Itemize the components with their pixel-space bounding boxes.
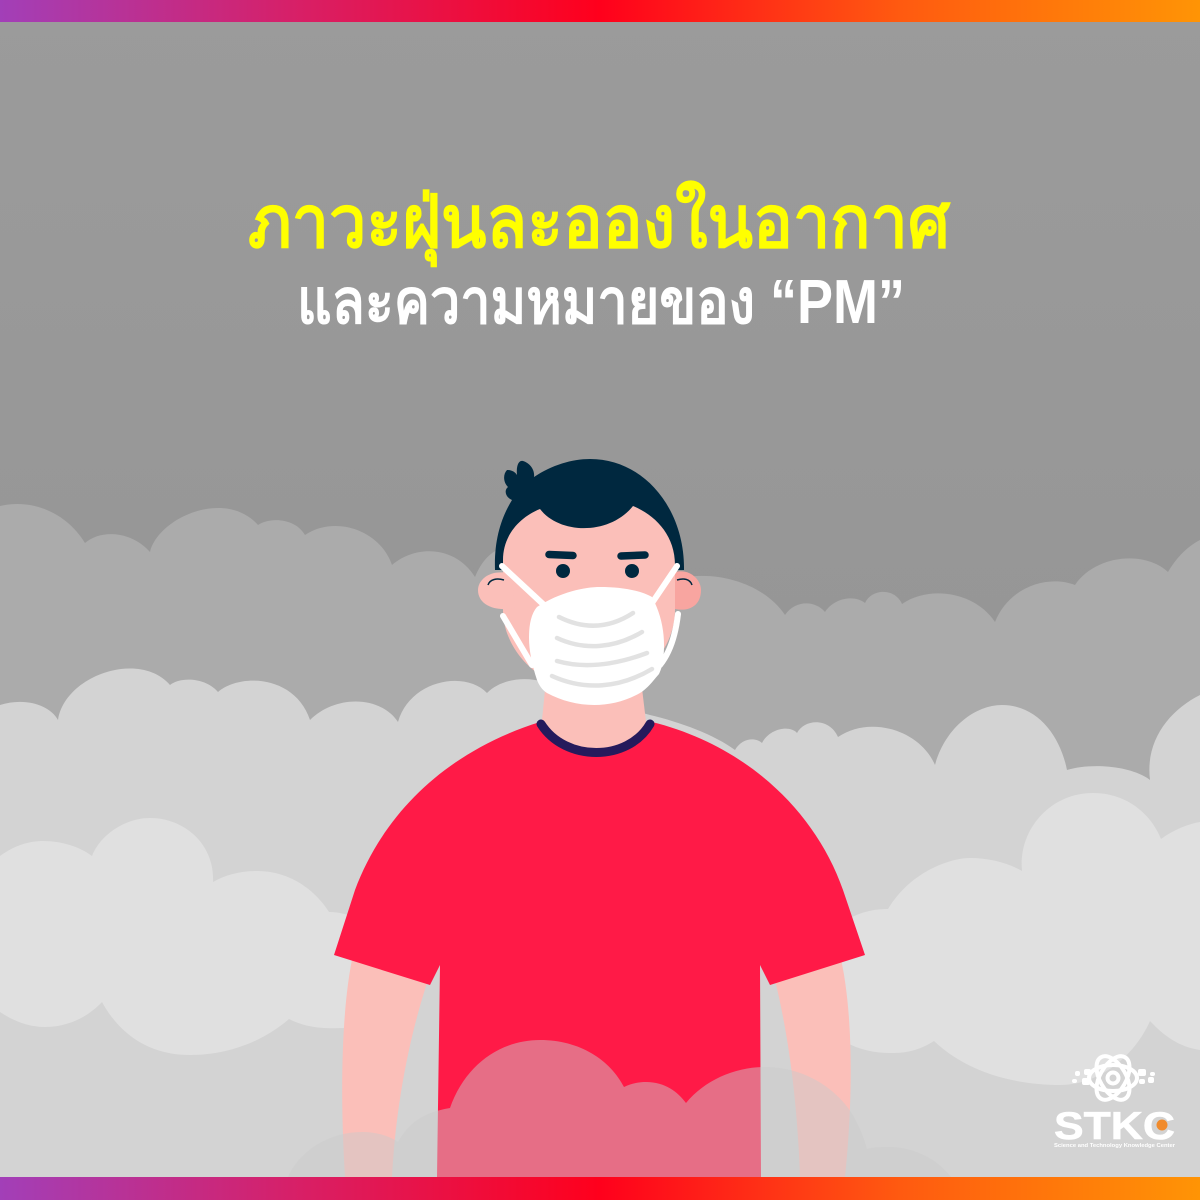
face: [503, 506, 675, 690]
mask straps: [502, 566, 678, 665]
left arm: [342, 955, 428, 1177]
bottom gradient band: [0, 1177, 1200, 1200]
middle cloud layer: [0, 669, 1200, 1200]
top gradient band: [0, 0, 1200, 22]
subtitle: และความหมายของ “PM”: [297, 268, 905, 337]
left eyebrow: [549, 554, 573, 556]
logo accent dot: [1156, 1120, 1168, 1130]
right eyebrow: [621, 555, 645, 556]
logo atom icon: [1089, 1051, 1137, 1105]
left eye: [556, 564, 570, 578]
neck: [541, 680, 647, 750]
logo dots: [1072, 1069, 1155, 1085]
shirt collar: [541, 724, 650, 752]
back cloud layer: [0, 504, 1200, 1200]
hair: [495, 459, 684, 570]
right front cloud layer: [840, 793, 1200, 1085]
left ear line: [488, 579, 504, 585]
foreground translucent cloud: [288, 1040, 951, 1177]
title: ภาวะฝุ่นละอองในอากาศ: [248, 179, 952, 268]
right arm: [775, 955, 851, 1177]
STKC logo: [1054, 1051, 1176, 1149]
face mask: [529, 587, 664, 705]
logo wordmark: STKC: [1054, 1105, 1175, 1148]
left front cloud layer: [0, 818, 360, 1055]
left ear: [478, 572, 515, 609]
right ear: [675, 571, 701, 610]
right eye: [625, 564, 639, 578]
t-shirt: [334, 722, 865, 1177]
person: [334, 459, 865, 1177]
logo tagline: Science and Technology Knowledge Center: [1054, 1143, 1176, 1149]
right ear line: [677, 579, 692, 585]
mask pleats: [552, 613, 652, 686]
